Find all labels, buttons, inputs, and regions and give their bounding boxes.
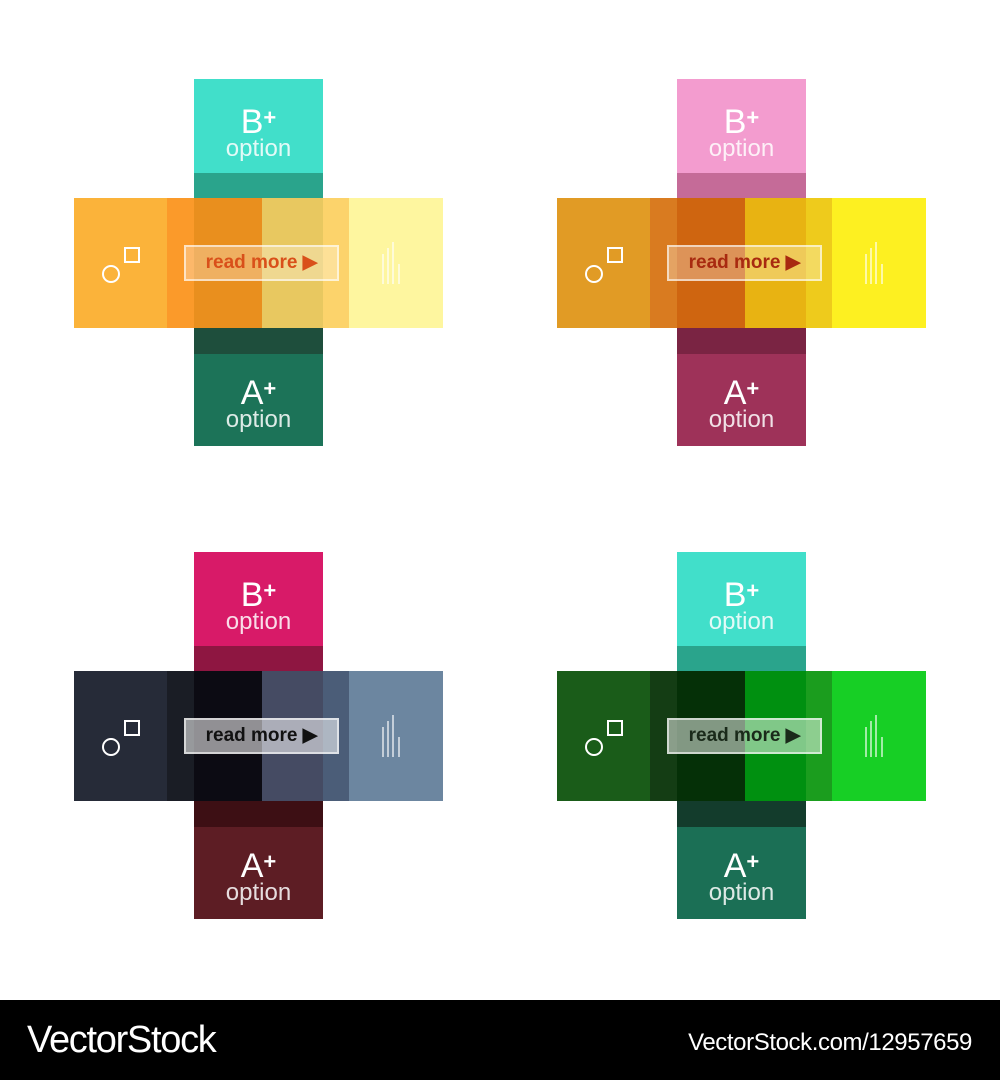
cross: yellow pink [557,79,926,446]
icon: lines [865,715,883,757]
top box B+: option [226,135,291,162]
top box B+ [677,79,806,173]
button: read more: read more ▶ [206,252,317,273]
cross: dark magenta [74,552,443,919]
bottom box A+: option [709,406,774,433]
icon: shapes [585,247,623,283]
bottom box A+ [677,827,806,919]
bottom box A+ [194,354,323,446]
icon: lines [382,242,400,284]
cross: green teal [557,552,926,919]
top box B+: option [226,608,291,635]
button: read more [184,718,339,754]
button: read more: read more ▶ [206,725,317,746]
icon: shapes [585,720,623,756]
icon: lines [382,715,400,757]
footer url: VectorStock.com/12957659 [688,1029,972,1056]
top box B+ [194,552,323,646]
button: read more [184,245,339,281]
bottom box A+: option [226,879,291,906]
top box B+: B+ [724,576,759,614]
bottom box A+: A+ [241,374,276,412]
top box B+: option [709,608,774,635]
button: read more [667,245,822,281]
bottom box A+ [194,827,323,919]
top box B+: option [709,135,774,162]
bottom box A+: option [226,406,291,433]
icon: shapes [102,247,140,283]
bottom box A+: A+ [241,847,276,885]
footer logo: VectorStock [27,1019,215,1061]
button: read more [667,718,822,754]
bottom box A+ [677,354,806,446]
bottom box A+: A+ [724,847,759,885]
top box B+: B+ [241,103,276,141]
cross: orange teal [74,79,443,446]
button: read more: read more ▶ [689,252,800,273]
bottom box A+: A+ [724,374,759,412]
icon: shapes [102,720,140,756]
button: read more: read more ▶ [689,725,800,746]
top box B+ [677,552,806,646]
footer [0,1000,1000,1080]
icon: lines [865,242,883,284]
top box B+ [194,79,323,173]
top box B+: B+ [241,576,276,614]
top box B+: B+ [724,103,759,141]
bottom box A+: option [709,879,774,906]
